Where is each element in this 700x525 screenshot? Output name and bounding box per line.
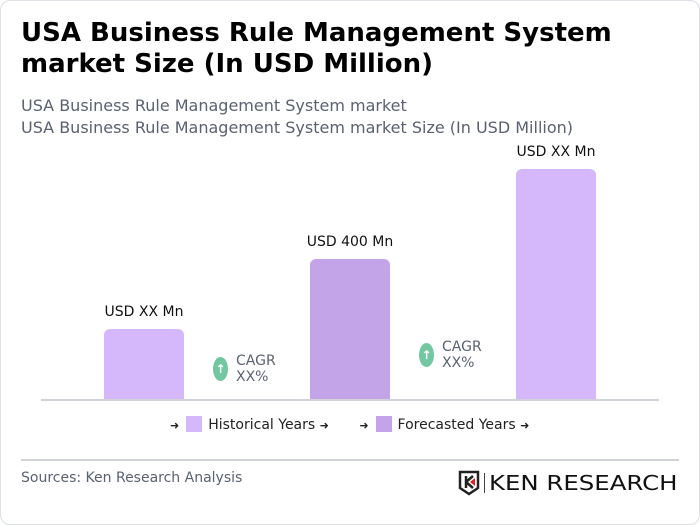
subtitle: USA Business Rule Management System market	[21, 96, 407, 115]
subtitle: USA Business Rule Management System market Size (In USD Million)	[21, 118, 573, 137]
bar chart	[41, 144, 659, 401]
legend: ➜ Historical Years ➜ ➜ Forecasted Years ➜	[170, 417, 529, 433]
bar 2	[310, 259, 390, 400]
title: market Size (In USD Million)	[21, 49, 433, 79]
icon: up arrow: ↑	[215, 362, 226, 376]
logo: KEN RESEARCH	[489, 471, 678, 495]
bar 1	[104, 329, 184, 400]
bar 1 label: USD XX Mn	[105, 304, 183, 320]
title: USA Business Rule Management System	[21, 18, 612, 48]
cagr 1: CAGR	[236, 353, 276, 369]
icon: up arrow	[419, 343, 434, 367]
bar 3	[516, 169, 596, 400]
cagr 1	[213, 353, 276, 385]
title	[21, 18, 612, 79]
icon: up arrow	[213, 357, 228, 381]
icon: up arrow: ↑	[421, 348, 432, 362]
bar 2 label: USD 400 Mn	[307, 234, 393, 250]
icon: shield	[458, 470, 480, 496]
cagr 2: XX%	[442, 355, 474, 371]
cagr 2: CAGR	[442, 339, 482, 355]
subtitle	[21, 96, 573, 137]
bar 3 label: USD XX Mn	[517, 144, 595, 160]
cagr 2	[419, 339, 482, 371]
cagr 1: XX%	[236, 369, 268, 385]
sources: Sources: Ken Research Analysis	[21, 470, 242, 486]
axis	[41, 399, 659, 401]
